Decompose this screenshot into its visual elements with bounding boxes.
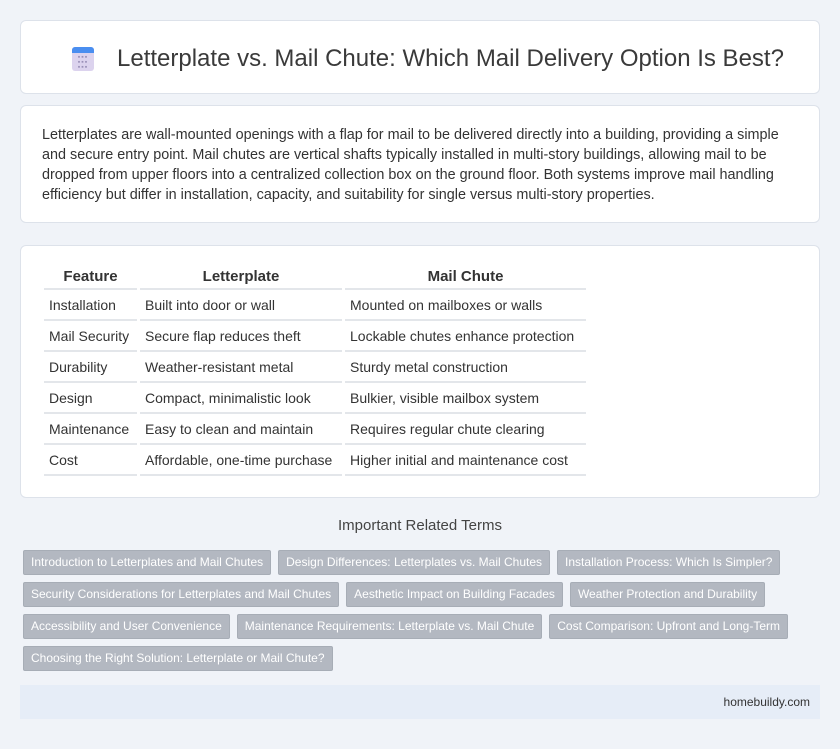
comparison table: Design [49, 390, 93, 406]
comparison table: Mounted on mailboxes or walls [350, 296, 542, 312]
related terms tags: Accessibility and User Convenience [31, 619, 222, 633]
comparison table: Installation [49, 296, 116, 312]
related terms tags: Cost Comparison: Upfront and Long-Term [557, 619, 780, 633]
icon: calendar: ▪▪▪ [78, 54, 88, 61]
comparison table: Secure flap reduces theft [145, 328, 301, 344]
icon: calendar [72, 47, 94, 71]
icon: calendar: ▪▪▪ [78, 64, 88, 71]
comparison table: Easy to clean and maintain [145, 420, 313, 436]
comparison table: Maintenance [49, 420, 129, 436]
footer [20, 685, 820, 719]
comparison table: Lockable chutes enhance protection [350, 328, 574, 344]
related terms tags: Weather Protection and Durability [578, 587, 757, 601]
comparison table: Feature [63, 268, 118, 284]
comparison table: Sturdy metal construction [350, 358, 508, 374]
comparison table [44, 268, 586, 476]
related terms tags: Design Differences: Letterplates vs. Mail Chutes [286, 555, 542, 569]
related terms tags: Choosing the Right Solution: Letterplate or Mail Chute? [31, 651, 325, 665]
comparison table: Compact, minimalistic look [145, 390, 311, 406]
comparison table: Mail Chute [428, 268, 503, 284]
comparison table: Built into door or wall [145, 296, 275, 312]
comparison table: Higher initial and maintenance cost [350, 452, 568, 468]
related terms tags: Aesthetic Impact on Building Facades [354, 587, 555, 601]
comparison table: Weather-resistant metal [145, 358, 293, 374]
intro text card [20, 105, 820, 223]
related terms tags: Introduction to Letterplates and Mail Chutes [31, 555, 263, 569]
footer source: homebuildy.com [724, 695, 810, 709]
header card [20, 20, 820, 94]
intro paragraph: Letterplates are wall-mounted openings with a flap for mail to be delivered directly into a building, providing a simple and secure entry point. Mail chutes are vertical shafts typically installed in multi-story buildings, allowing mail to be dropped from upper floors into a centralized collection box on the ground floor. Both systems improve mail handling efficiency but differ in installation, capacity, and suitability for single versus multi-story properties. [42, 127, 779, 203]
comparison table: Bulkier, visible mailbox system [350, 390, 539, 406]
comparison table: Mail Security [49, 328, 129, 344]
comparison table card [20, 245, 820, 498]
comparison table: Affordable, one-time purchase [145, 452, 332, 468]
comparison table: Cost [49, 452, 78, 468]
related terms heading: Important Related Terms [338, 517, 502, 534]
comparison table: Requires regular chute clearing [350, 420, 545, 436]
icon: calendar: ▪▪▪ [78, 59, 88, 66]
comparison table: Durability [49, 358, 107, 374]
related terms tags: Installation Process: Which Is Simpler? [565, 555, 772, 569]
related terms tags: Security Considerations for Letterplates and Mail Chutes [31, 587, 331, 601]
related terms tags [23, 550, 788, 671]
comparison table: Letterplate [203, 268, 279, 284]
title: Letterplate vs. Mail Chute: Which Mail Delivery Option Is Best? [117, 45, 784, 72]
related terms tags: Maintenance Requirements: Letterplate vs. Mail Chute [245, 619, 534, 633]
